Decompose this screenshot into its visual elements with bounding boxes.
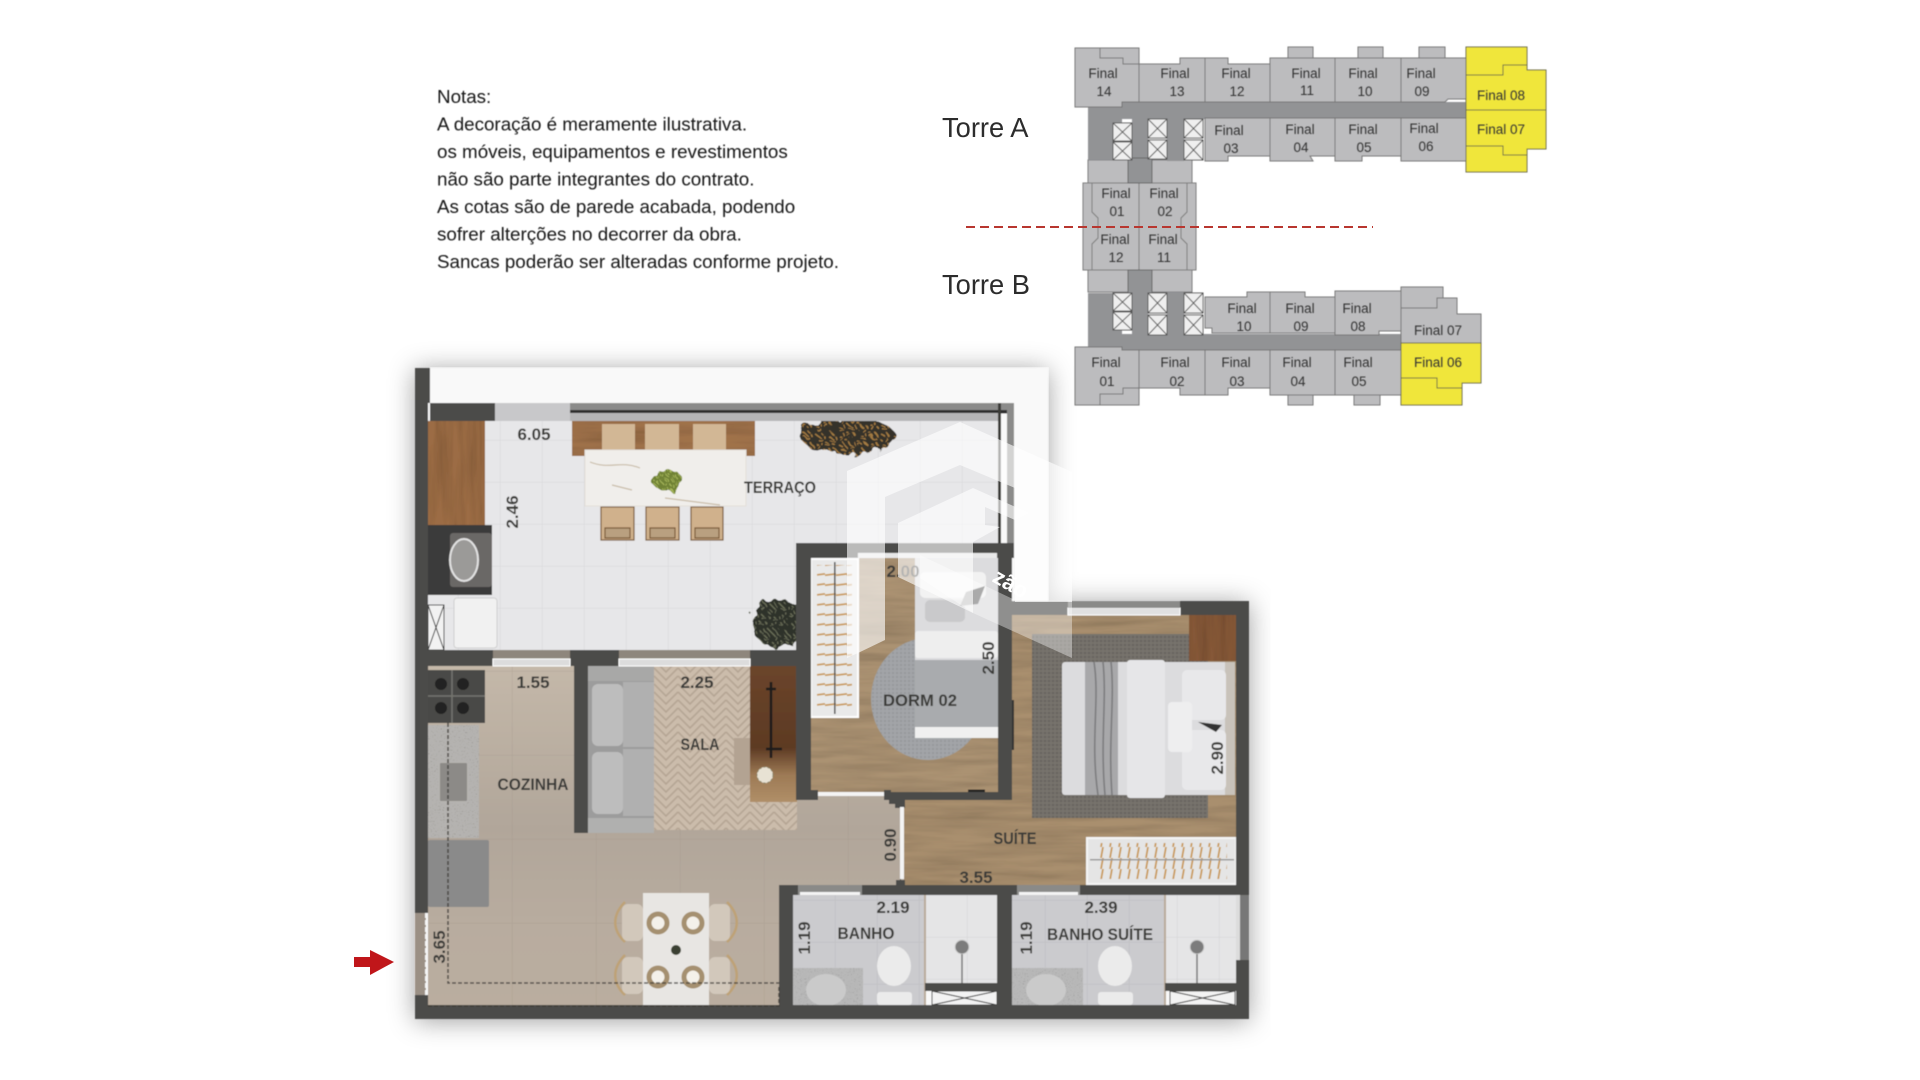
dorm 02 room <box>811 553 999 794</box>
tower A label: Torre A <box>942 112 1029 143</box>
tower unit labels: 04 <box>1293 140 1309 155</box>
tower B elevators <box>1113 293 1203 335</box>
room labels: 1.19 <box>795 922 814 954</box>
room labels: SUÍTE <box>994 829 1036 848</box>
tower unit labels: Final <box>1160 355 1190 370</box>
tower unit labels: Final <box>1148 232 1178 247</box>
terrace wood cabinet <box>428 421 485 525</box>
room labels: 6.05 <box>518 425 550 444</box>
notes text <box>437 86 839 272</box>
watermark logo: zão <box>989 564 1033 604</box>
tower divider dashed line <box>966 226 1373 228</box>
room labels: 2.46 <box>503 496 522 528</box>
room labels: 2.50 <box>979 642 998 674</box>
sofa <box>588 666 654 833</box>
tower unit labels: 10 <box>1357 84 1373 99</box>
dorm door detail <box>968 790 985 792</box>
dining table <box>615 893 737 1005</box>
tower unit labels: 12 <box>1229 84 1245 99</box>
tower unit labels: Final <box>1409 121 1439 136</box>
suite bathroom shaft <box>1170 991 1235 1005</box>
tower unit labels: 02 <box>1157 204 1173 219</box>
terrace marble table <box>585 450 746 506</box>
tower unit labels: 12 <box>1108 250 1124 265</box>
tower key plan <box>1075 47 1546 405</box>
notes text: sofrer alterções no decorrer da obra. <box>437 224 742 244</box>
tower unit labels: Final <box>1149 186 1179 201</box>
side seat <box>734 738 750 785</box>
room labels: BANHO <box>838 924 894 943</box>
room labels: TERRAÇO <box>744 478 816 497</box>
dorm bed <box>915 553 998 738</box>
suite bathroom <box>1012 895 1236 1006</box>
suite bathroom toilet <box>1098 946 1133 1005</box>
highlighted units tower A <box>1466 47 1546 172</box>
terrace floor <box>428 403 998 652</box>
room labels: SALA <box>680 735 720 754</box>
tower unit labels: Final <box>1342 301 1372 316</box>
suite bathroom shower head <box>1190 940 1204 983</box>
tower B label: Torre B <box>942 269 1030 300</box>
notes text: As cotas são de parede acabada, podendo <box>437 196 795 217</box>
tower unit labels: Final <box>1285 122 1315 137</box>
double bed <box>1062 660 1235 798</box>
tower unit labels: Final <box>1406 66 1436 81</box>
corridors tower A <box>1088 102 1466 183</box>
suite closet <box>1087 838 1236 884</box>
tower unit labels: 11 <box>1300 83 1314 98</box>
terrace chairs <box>601 507 723 540</box>
kitchen and living floor <box>428 666 904 1005</box>
kitchen dashed line <box>428 723 779 1006</box>
tower unit labels: Final <box>1221 355 1251 370</box>
tower unit labels: Final <box>1348 66 1378 81</box>
terrace laundry tank <box>454 598 497 648</box>
room labels: 1.19 <box>1017 922 1036 954</box>
tower unit labels: Final <box>1285 301 1315 316</box>
tower unit labels: 10 <box>1236 319 1252 334</box>
tower unit labels: Final <box>1282 355 1312 370</box>
suite room <box>904 615 1236 885</box>
tower unit labels: Final <box>1343 355 1373 370</box>
terrace bench <box>572 421 755 456</box>
tower unit labels: 01 <box>1099 374 1115 389</box>
notes text: não são parte integrantes do contrato. <box>437 168 754 190</box>
tower shared structure <box>1083 160 1196 292</box>
suite rug <box>1032 634 1208 818</box>
bathroom shower head <box>955 940 969 983</box>
highlighted unit tower B <box>1401 343 1481 405</box>
tower unit labels: 03 <box>1223 141 1239 156</box>
tower unit labels: 03 <box>1229 374 1245 389</box>
tower unit labels: Final <box>1221 66 1251 81</box>
tower unit labels: Final <box>1348 122 1378 137</box>
room labels: BANHO SUÍTE <box>1047 925 1153 944</box>
tower unit labels: 11 <box>1157 250 1171 265</box>
room labels: 2.39 <box>1084 898 1118 917</box>
terrace sink counter <box>428 525 492 595</box>
room labels: 2.19 <box>876 898 910 917</box>
kitchen counter <box>428 725 479 838</box>
entrance arrow <box>354 950 394 975</box>
tower unit labels: Final <box>1100 232 1130 247</box>
bathroom vanity <box>793 968 863 1005</box>
tower unit labels: Final <box>1214 123 1244 138</box>
fridge <box>428 840 489 907</box>
tower unit labels: 04 <box>1290 374 1306 389</box>
tower A units <box>1075 47 1466 161</box>
tower unit labels: 14 <box>1096 84 1112 99</box>
tower unit labels: Final <box>1160 66 1190 81</box>
room labels: 0.90 <box>881 828 900 862</box>
room labels: 1.55 <box>516 673 550 692</box>
bathroom <box>793 895 997 1006</box>
tower unit labels: Final 07 <box>1477 122 1525 137</box>
tower unit labels: Final <box>1227 301 1257 316</box>
dorm closet <box>811 559 858 717</box>
room labels: 3.65 <box>430 930 449 964</box>
room labels <box>430 425 1227 964</box>
notes text: os móveis, equipamentos e revestimentos <box>437 141 788 162</box>
notes text: Notas: <box>437 86 491 107</box>
bathroom shower <box>925 895 997 983</box>
room labels: 2.25 <box>680 673 714 692</box>
terrace small plant <box>752 600 808 648</box>
dorm round rug <box>871 638 985 760</box>
tower unit labels: Final <box>1101 186 1131 201</box>
tower unit labels: Final <box>1291 66 1321 81</box>
tower unit labels: 08 <box>1350 319 1366 334</box>
bathroom shaft <box>932 991 997 1005</box>
suite bathroom shower <box>1165 895 1236 983</box>
terrace cushions <box>602 424 726 452</box>
notes text: A decoração é meramente ilustrativa. <box>437 114 747 134</box>
suite bathroom vanity <box>1012 968 1083 1005</box>
tower A elevators <box>1113 119 1203 160</box>
tower unit labels: 05 <box>1356 140 1372 155</box>
table centre plant <box>652 469 682 491</box>
notes text: Sancas poderão ser alteradas conforme projeto. <box>437 251 839 272</box>
floor plan <box>415 368 1249 1019</box>
tv panel <box>750 666 797 802</box>
tower unit labels: 01 <box>1109 204 1125 219</box>
terrace large planter <box>801 417 895 455</box>
tower unit labels: 05 <box>1351 374 1367 389</box>
tower unit labels: 06 <box>1418 139 1434 154</box>
nightstand <box>1189 615 1236 661</box>
kitchen stove <box>428 670 485 723</box>
bathroom toilet <box>877 946 912 1005</box>
kitchen sink <box>439 762 468 802</box>
tower unit labels: 02 <box>1169 374 1185 389</box>
plan base with shadow <box>415 368 1249 1019</box>
living rug <box>654 666 797 830</box>
windows and doors <box>415 553 1240 995</box>
watermark logo <box>847 422 1072 658</box>
room labels: 2.00 <box>886 562 920 581</box>
walls <box>415 368 1249 1019</box>
tower unit labels: Final 06 <box>1414 355 1462 370</box>
room labels: 3.55 <box>960 868 992 887</box>
tower B units <box>1075 287 1481 405</box>
tower unit labels: Final <box>1091 355 1121 370</box>
tower unit labels: 13 <box>1169 84 1185 99</box>
tv <box>766 682 782 758</box>
tower unit labels <box>1088 66 1525 389</box>
corridors tower B <box>1088 270 1401 350</box>
tower unit labels: Final 07 <box>1414 323 1462 338</box>
room labels: COZINHA <box>498 775 568 794</box>
flowers <box>757 767 773 783</box>
tower unit labels: 09 <box>1414 84 1430 99</box>
tower unit labels: Final <box>1088 66 1118 81</box>
tower unit labels: Final 08 <box>1477 88 1525 103</box>
room labels: DORM 02 <box>883 691 957 710</box>
room labels: 2.90 <box>1208 742 1227 774</box>
tower unit labels: 09 <box>1293 319 1309 334</box>
terrace shaft <box>428 605 444 650</box>
